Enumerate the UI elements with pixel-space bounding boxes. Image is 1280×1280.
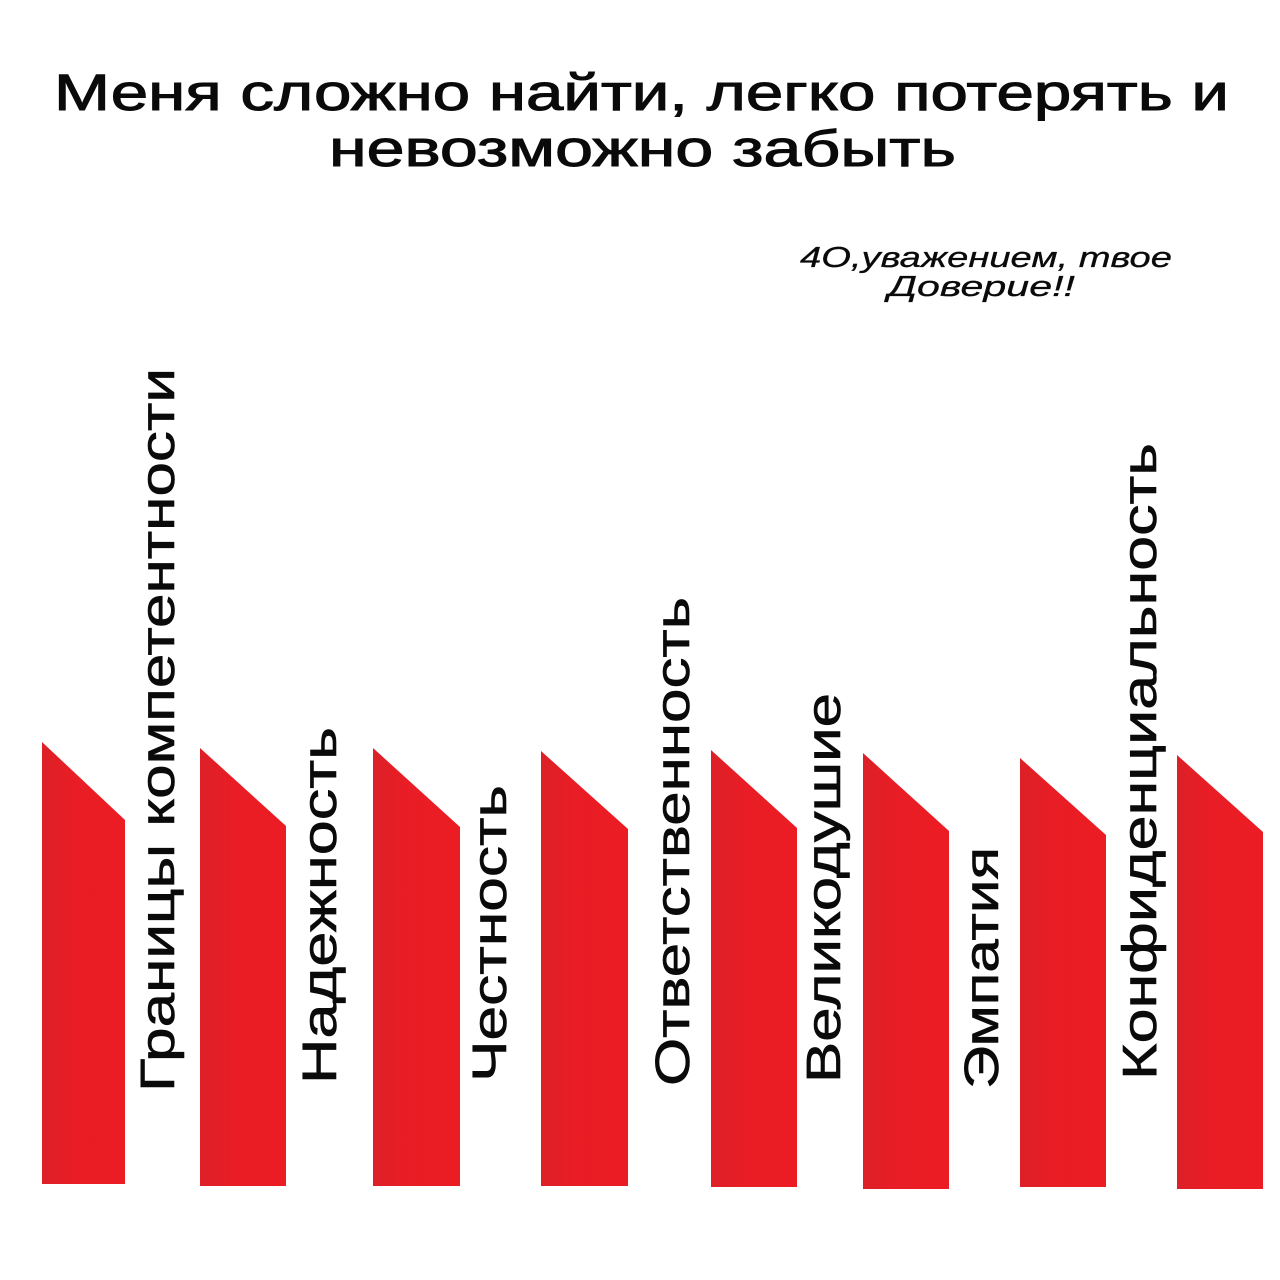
bar 1: Границы компетентности: Границы компетентности [132, 368, 185, 1092]
bar 6: Эмпатия: Эмпатия [956, 847, 1009, 1089]
signature note: Доверие!! [884, 271, 1075, 303]
bar 5: Великодушие [711, 693, 851, 1187]
bar 5: Великодушие: Великодушие [798, 693, 851, 1083]
signature note [800, 242, 1172, 303]
bar 2: Надежность [200, 727, 347, 1186]
bar 4: Ответственность: Ответственность [647, 597, 700, 1086]
bar 3: Честность [373, 748, 517, 1186]
signature note: 4О,уважением, твое [800, 242, 1172, 274]
bar 6: Эмпатия [863, 753, 1009, 1189]
title: Меня сложно найти, легко потерять и [54, 64, 1229, 121]
title: невозможно забыть [329, 120, 956, 177]
bar 4: Ответственность [541, 597, 700, 1186]
bar 8 [1177, 755, 1263, 1189]
bar 7: Конфиденциальность: Конфиденциальность [1114, 443, 1167, 1080]
bar 3: Честность: Честность [464, 785, 517, 1082]
bar 7: Конфиденциальность [1020, 443, 1167, 1187]
bar 1: Границы компетентности [42, 368, 185, 1184]
bar 2: Надежность: Надежность [294, 727, 347, 1084]
title [54, 64, 1229, 177]
